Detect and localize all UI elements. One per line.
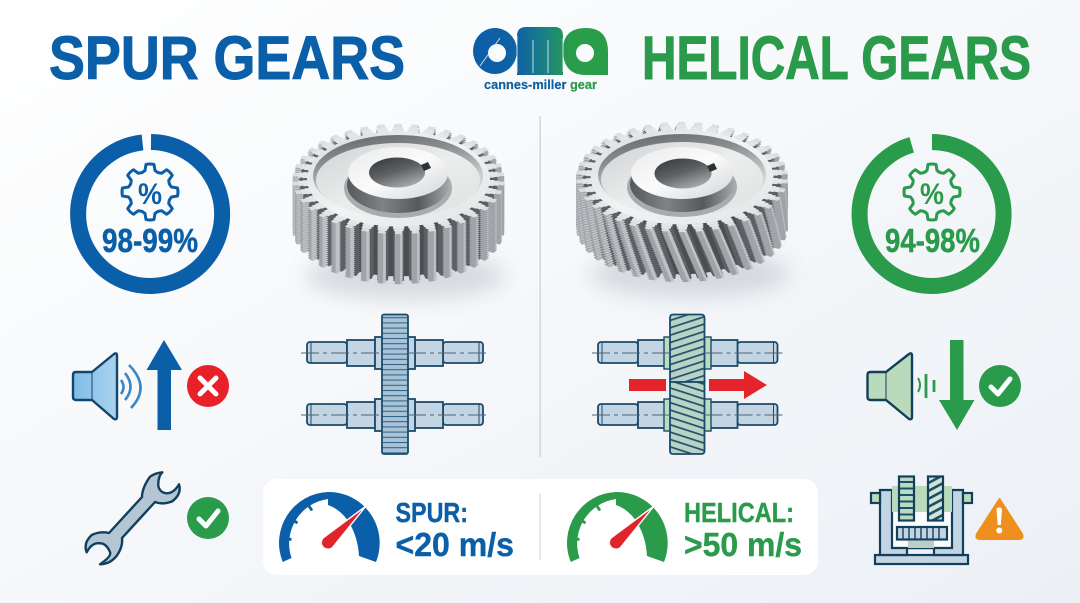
icon: gearbox with warning bbox=[871, 476, 1023, 564]
center divider bbox=[540, 116, 541, 457]
logo: cannes-miller gear bbox=[473, 27, 608, 92]
donut: spur efficiency bbox=[78, 142, 222, 286]
text: helical speed: >50 m/s bbox=[684, 526, 802, 563]
donut: helical efficiency: 94-98% bbox=[885, 222, 980, 259]
text: helical speed bbox=[684, 497, 802, 563]
icon: percent gear green bbox=[904, 164, 960, 220]
helical gear photo bbox=[579, 123, 790, 298]
panel: speed comparison bbox=[263, 479, 818, 575]
gauge: spur speed bbox=[279, 492, 380, 562]
icon: quiet speaker with down arrow and check bbox=[868, 340, 1021, 430]
text: spur speed: SPUR: bbox=[396, 497, 468, 528]
diagram: spur shafts and gear bbox=[301, 314, 489, 454]
donut: helical efficiency: % bbox=[920, 178, 944, 211]
icon: loud speaker with up arrow and cross bbox=[73, 340, 229, 430]
logo: cannes-miller gear: cannes-miller gear bbox=[484, 77, 597, 92]
text: helical speed: HELICAL: bbox=[684, 497, 794, 528]
donut: helical efficiency bbox=[860, 142, 1004, 286]
spur gear photo bbox=[296, 125, 505, 300]
diagram: helical shafts with axial thrust arrow bbox=[592, 314, 783, 454]
gauge: helical speed bbox=[567, 492, 668, 562]
arrow: axial thrust bbox=[629, 371, 767, 399]
donut: spur efficiency: % bbox=[138, 178, 162, 211]
text: spur speed: <20 m/s bbox=[396, 526, 514, 563]
donut: spur efficiency: 98-99% bbox=[102, 222, 198, 259]
icon: percent gear bbox=[122, 164, 178, 220]
text: spur speed bbox=[396, 497, 514, 563]
icon: wrench with check bbox=[86, 472, 229, 564]
title: spur gears: SPUR GEARS bbox=[49, 24, 405, 92]
